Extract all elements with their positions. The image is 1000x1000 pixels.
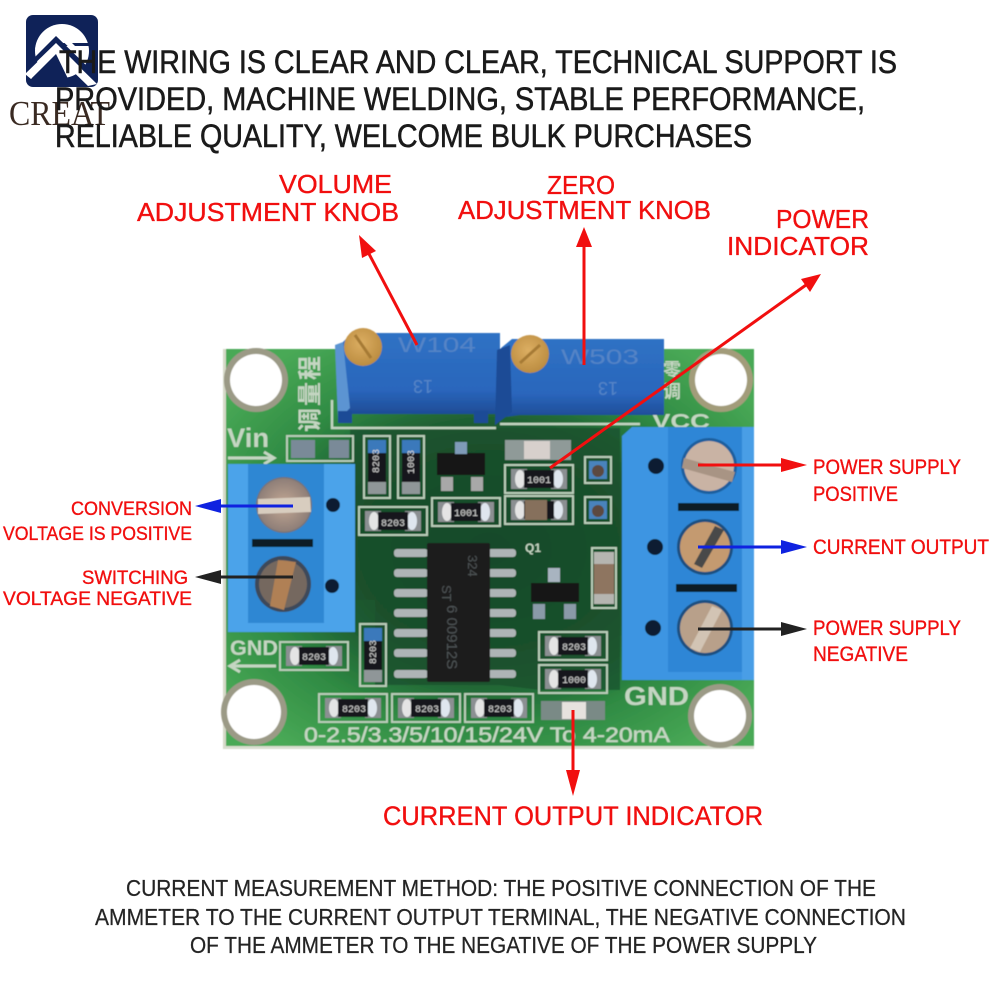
logo: CREAT brand mark — [9, 15, 110, 133]
surface-mount resistors and pads: 8203 — [369, 640, 380, 664]
label: power supply positive — [813, 456, 961, 506]
title: wiring and quality statement: THE WIRING IS CLEAR AND CLEAR, TECHNICAL SUPPORT IS — [59, 44, 897, 80]
arrow: current output indicator — [566, 710, 580, 796]
label: conversion voltage positive: CONVERSION — [71, 499, 192, 520]
label: switching voltage negative: VOLTAGE NEGATIVE — [3, 589, 192, 610]
board silkscreen labels: VCC — [652, 411, 710, 433]
potentiometer: zero adjustment: W503 — [561, 346, 639, 369]
surface-mount resistors and pads: 1001 — [527, 476, 551, 487]
IC chip with pins: 324 — [465, 555, 480, 577]
board silkscreen labels: Q1 — [525, 541, 541, 555]
arrow: current output — [698, 540, 807, 554]
label: power indicator — [727, 204, 869, 261]
label: conversion voltage positive — [3, 499, 192, 545]
surface-mount resistors and pads: 8203 — [488, 705, 512, 716]
label: volume adjustment knob: ADJUSTMENT KNOB — [137, 197, 399, 227]
surface-mount resistors and pads: 1001 — [454, 509, 478, 520]
text block: current measurement method: CURRENT MEASUREMENT METHOD: THE POSITIVE CONNECTION OF THE — [126, 875, 876, 901]
arrow: power supply negative — [698, 622, 807, 636]
arrow: power indicator — [550, 274, 821, 468]
potentiometer: volume adjustment: W104 — [398, 334, 476, 357]
logo: CREAT brand mark: CREAT — [9, 94, 110, 133]
label: power indicator: INDICATOR — [727, 231, 869, 261]
terminal block: right output — [622, 427, 754, 680]
label: power supply positive: POWER SUPPLY — [813, 456, 961, 479]
arrow: conversion voltage positive — [195, 499, 293, 513]
board silkscreen labels: 程 — [297, 356, 324, 380]
board silkscreen labels — [227, 356, 710, 747]
label: power supply negative: POWER SUPPLY — [813, 617, 961, 640]
label: zero adjustment knob — [458, 170, 711, 225]
arrow: power supply positive — [698, 458, 807, 472]
label: power supply negative: NEGATIVE — [813, 643, 908, 666]
surface-mount resistors and pads: 1003 — [407, 450, 418, 474]
label: switching voltage negative: SWITCHING — [82, 568, 188, 589]
title: wiring and quality statement — [55, 44, 897, 154]
text block: current measurement method: AMMETER TO THE CURRENT OUTPUT TERMINAL, THE NEGATIVE CONNECTION — [95, 904, 906, 930]
board: green PCB — [223, 349, 754, 749]
potentiometer: volume adjustment: 13 — [413, 376, 433, 396]
text block: current measurement method: OF THE AMMETER TO THE NEGATIVE OF THE POWER SUPPLY — [190, 932, 817, 958]
IC chip with pins — [394, 543, 516, 682]
label: current output indicator: CURRENT OUTPUT INDICATOR — [383, 801, 763, 831]
arrow: zero knob — [576, 227, 592, 365]
arrow: switching voltage negative — [195, 570, 293, 584]
label: switching voltage negative — [3, 568, 192, 610]
transistors — [437, 442, 579, 619]
board silkscreen labels: 量 — [297, 382, 324, 406]
board silkscreen labels: 零 — [663, 360, 681, 380]
surface-mount resistors and pads: 8203 — [381, 519, 405, 530]
title: wiring and quality statement: RELIABLE QUALITY, WELCOME BULK PURCHASES — [55, 118, 752, 154]
potentiometer: volume adjustment — [335, 328, 500, 423]
label: zero adjustment knob: ZERO — [547, 170, 615, 200]
board silkscreen labels: 调 — [297, 408, 324, 432]
IC chip with pins: 6 00912S — [443, 605, 460, 669]
surface-mount resistors and pads: 8203 — [415, 705, 439, 716]
board silkscreen labels: Vin — [227, 423, 269, 453]
board silkscreen labels: 0-2.5/3.3/5/10/15/24V To 4-20mA — [304, 724, 670, 747]
label: power indicator: POWER — [776, 204, 869, 234]
mounting holes — [221, 348, 753, 748]
board silkscreen labels: GND — [624, 681, 689, 711]
label: conversion voltage positive: VOLTAGE IS POSITIVE — [3, 524, 192, 545]
label: power supply positive: POSITIVE — [813, 483, 898, 506]
surface-mount resistors and pads: 1000 — [562, 676, 586, 687]
terminal block: left input — [228, 464, 355, 632]
circuit board photo illustration — [221, 328, 754, 749]
potentiometer: zero adjustment — [495, 335, 664, 425]
label: volume adjustment knob — [137, 169, 399, 227]
label: power supply negative — [813, 617, 961, 666]
board silkscreen labels: 调 — [663, 382, 681, 402]
surface-mount resistors and pads — [280, 436, 616, 722]
surface-mount resistors and pads: 8203 — [372, 449, 383, 473]
surface-mount resistors and pads: 8203 — [302, 653, 326, 664]
label: zero adjustment knob: ADJUSTMENT KNOB — [458, 195, 711, 225]
surface-mount resistors and pads: 8203 — [562, 643, 586, 654]
title: wiring and quality statement: PROVIDED, MACHINE WELDING, STABLE PERFORMANCE, — [55, 81, 865, 117]
IC chip with pins: ST — [439, 585, 454, 602]
label: volume adjustment knob: VOLUME — [279, 169, 392, 199]
board silkscreen labels: GND — [230, 637, 278, 660]
potentiometer: zero adjustment: 13 — [598, 378, 618, 398]
surface-mount resistors and pads: 8203 — [342, 705, 366, 716]
arrow: volume knob — [359, 235, 417, 345]
text block: current measurement method — [95, 875, 906, 958]
